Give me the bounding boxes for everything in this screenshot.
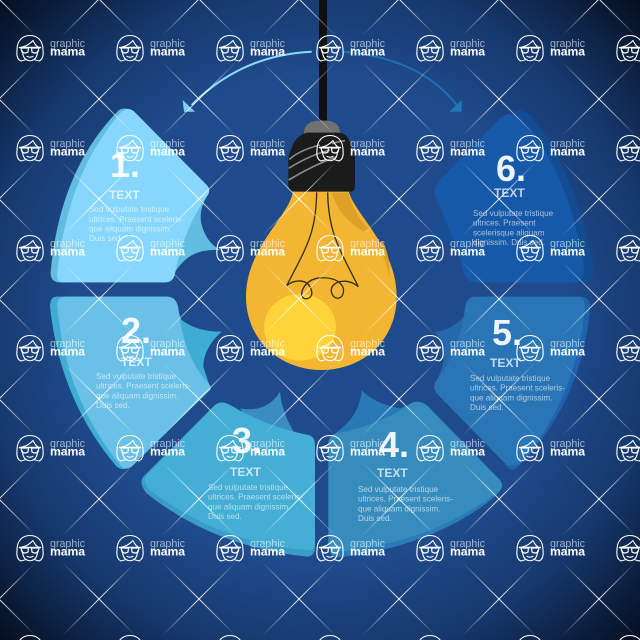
watermark: logo words: mama: [450, 344, 485, 358]
panel 1 heading: TEXT: [109, 188, 140, 202]
watermark: logo words: graphic: [150, 538, 186, 550]
watermark: logo words: mama: [50, 244, 85, 258]
panel 2: [50, 297, 222, 469]
panel 6: [427, 110, 594, 283]
watermark: logo words: mama: [250, 44, 285, 58]
panel 1 body: Sed vulputate tristique: [89, 205, 170, 214]
watermark: logo words: graphic: [50, 338, 86, 350]
watermark: logo words: graphic: [450, 138, 486, 150]
watermark: logo words: mama: [350, 444, 385, 458]
watermark: logo words: mama: [250, 344, 285, 358]
panel 3 number: 3.: [232, 420, 262, 461]
panel 4 shape: [328, 390, 502, 557]
panel 2 heading: TEXT: [121, 355, 152, 369]
watermark: logo words: mama: [550, 44, 585, 58]
watermark: logo words: graphic: [550, 338, 586, 350]
watermark: logo words: graphic: [450, 238, 486, 250]
watermark: logo words: graphic: [150, 138, 186, 150]
panel 3 body: Sed vulputate tristique: [208, 483, 289, 492]
panel 6 number: 6.: [496, 148, 526, 189]
watermark: logo words: graphic: [250, 438, 286, 450]
watermark: logo words: mama: [150, 444, 185, 458]
watermark: logo words: graphic: [550, 438, 586, 450]
watermark: logo words: mama: [50, 444, 85, 458]
watermark: logo words: mama: [250, 244, 285, 258]
panel 4 heading: TEXT: [377, 466, 408, 480]
panel 3 heading: TEXT: [230, 465, 261, 479]
panel 1: [51, 109, 220, 282]
watermark: logo words: mama: [550, 344, 585, 358]
panel 6 body: dignissim. Duis sed.: [473, 238, 545, 247]
watermark: logo words: mama: [150, 244, 185, 258]
panel 3 shape: [141, 392, 315, 557]
watermark: logo words: mama: [250, 544, 285, 558]
panel 3 body: Duis sed.: [208, 512, 242, 521]
watermark: logo words: graphic: [50, 438, 86, 450]
panel 6 shape: [427, 110, 594, 283]
watermark: logo words: graphic: [50, 538, 86, 550]
watermark: logo words: graphic: [450, 538, 486, 550]
watermark: logo words: mama: [250, 444, 285, 458]
bulb glass: [246, 190, 397, 370]
watermark: logo words: graphic: [150, 338, 186, 350]
watermark: logo words: mama: [350, 44, 385, 58]
panel 1 body: Duis sed.: [89, 234, 123, 243]
socket cap: [304, 121, 340, 133]
panel 2 body: Duis sed.: [96, 401, 130, 410]
socket thread: [289, 141, 345, 180]
hanging cord: [319, 0, 327, 125]
watermark: logo words: graphic: [150, 438, 186, 450]
panel 5 body: Sed vulputate tristique: [470, 374, 551, 383]
watermark: logo words: graphic: [450, 438, 486, 450]
watermark: logo words: graphic: [550, 238, 586, 250]
watermark: logo words: graphic: [150, 38, 186, 50]
watermark: logo words: graphic: [350, 238, 386, 250]
watermark: logo words: graphic: [250, 38, 286, 50]
watermark: logo words: graphic: [150, 238, 186, 250]
watermark: logo words: graphic: [350, 38, 386, 50]
panel 4 body: que aliquam dignissim.: [358, 504, 440, 513]
arrow: curved left: [183, 52, 312, 112]
watermark: logo words: mama: [50, 544, 85, 558]
watermark: logo words: mama: [450, 144, 485, 158]
panel 4 body: Sed vulputate tristique: [358, 485, 439, 494]
watermark: logo words: mama: [550, 144, 585, 158]
watermark: logo words: mama: [50, 44, 85, 58]
panel 1 body: ultrices. Praesent sceleris-: [89, 215, 184, 224]
panel 6 heading: TEXT: [494, 186, 525, 200]
watermark: logo words: graphic: [50, 38, 86, 50]
panel 4 body: Duis sed.: [358, 514, 392, 523]
panel 2 body: Sed vulputate tristique: [96, 372, 177, 381]
panel 2 shape: [50, 297, 222, 469]
watermark: logo words: graphic: [50, 138, 86, 150]
panel 5 body: ultrices. Praesent sceleris-: [470, 384, 565, 393]
panel 4 body: ultrices. Praesent sceleris-: [358, 495, 453, 504]
panel 6 body: scelerisque aliquam: [473, 228, 545, 237]
panel 3 body: ultrices. Praesent sceleris-: [208, 493, 303, 502]
watermark: logo words: graphic: [450, 338, 486, 350]
watermark: logo words: mama: [50, 144, 85, 158]
watermark: logo words: [50, 38, 586, 558]
watermark: logo words: mama: [550, 444, 585, 458]
watermark: logo words: mama: [450, 244, 485, 258]
watermark: logo words: mama: [350, 144, 385, 158]
bulb shade: [332, 193, 390, 277]
panel 2 body: ultrices. Praesent sceleris-: [96, 382, 191, 391]
arrow: curved right: [343, 52, 462, 112]
panel 3: [141, 392, 315, 557]
watermark: logo words: graphic: [350, 538, 386, 550]
panel 1 number: 1.: [110, 144, 140, 185]
panel 5 heading: TEXT: [490, 356, 521, 370]
watermark: logo words: graphic: [350, 338, 386, 350]
socket: [288, 133, 355, 192]
watermark: logo words: mama: [50, 344, 85, 358]
panel 5 number: 5.: [492, 312, 522, 353]
watermark: logo words: graphic: [550, 138, 586, 150]
panel 3 body: que aliquam dignissim.: [208, 502, 290, 511]
watermark: logo words: graphic: [550, 38, 586, 50]
watermark: logo words: mama: [450, 44, 485, 58]
watermark: logo words: mama: [150, 544, 185, 558]
watermark: logo words: graphic: [250, 238, 286, 250]
watermark: logo words: mama: [250, 144, 285, 158]
panel 1 body: que aliquam dignissim.: [89, 224, 171, 234]
panel 4 number: 4.: [379, 424, 409, 465]
watermark: logo words: mama: [550, 244, 585, 258]
watermark: logo words: mama: [350, 544, 385, 558]
watermark: logo words: graphic: [50, 238, 86, 250]
bulb highlight: [264, 294, 336, 361]
watermark: logo words: mama: [150, 144, 185, 158]
watermark: logo words: mama: [550, 544, 585, 558]
panel 5 body: que aliquam dignissim.: [470, 393, 552, 402]
watermark: logo words: graphic: [250, 338, 286, 350]
panel 2 number: 2.: [121, 310, 151, 351]
watermark: logo words: mama: [350, 244, 385, 258]
panel 4: [328, 390, 502, 557]
panel 5: [434, 297, 590, 470]
panel 1 shape: [51, 109, 220, 282]
watermark: logo words: graphic: [350, 438, 386, 450]
watermark: logo words: mama: [150, 44, 185, 58]
watermark: logo words: mama: [150, 344, 185, 358]
filament: [287, 192, 358, 299]
panel 2 body: que aliquam dignissim.: [96, 391, 178, 400]
watermark: logo words: mama: [450, 544, 485, 558]
watermark: logo words: graphic: [250, 538, 286, 550]
watermark: logo words: graphic: [250, 138, 286, 150]
watermark: logo words: graphic: [550, 538, 586, 550]
watermark: logo words: mama: [350, 344, 385, 358]
light bulb: [246, 121, 397, 370]
panel 6 body: Sed vulputate tristique: [473, 209, 554, 218]
panel 5 body: Duis sed.: [470, 403, 504, 412]
panel 6 body: ultrices. Praesent: [473, 219, 536, 228]
watermark: logo words: graphic: [450, 38, 486, 50]
watermark: logo words: graphic: [350, 138, 386, 150]
watermark: logo words: mama: [450, 444, 485, 458]
panel 5 shape: [434, 297, 590, 470]
